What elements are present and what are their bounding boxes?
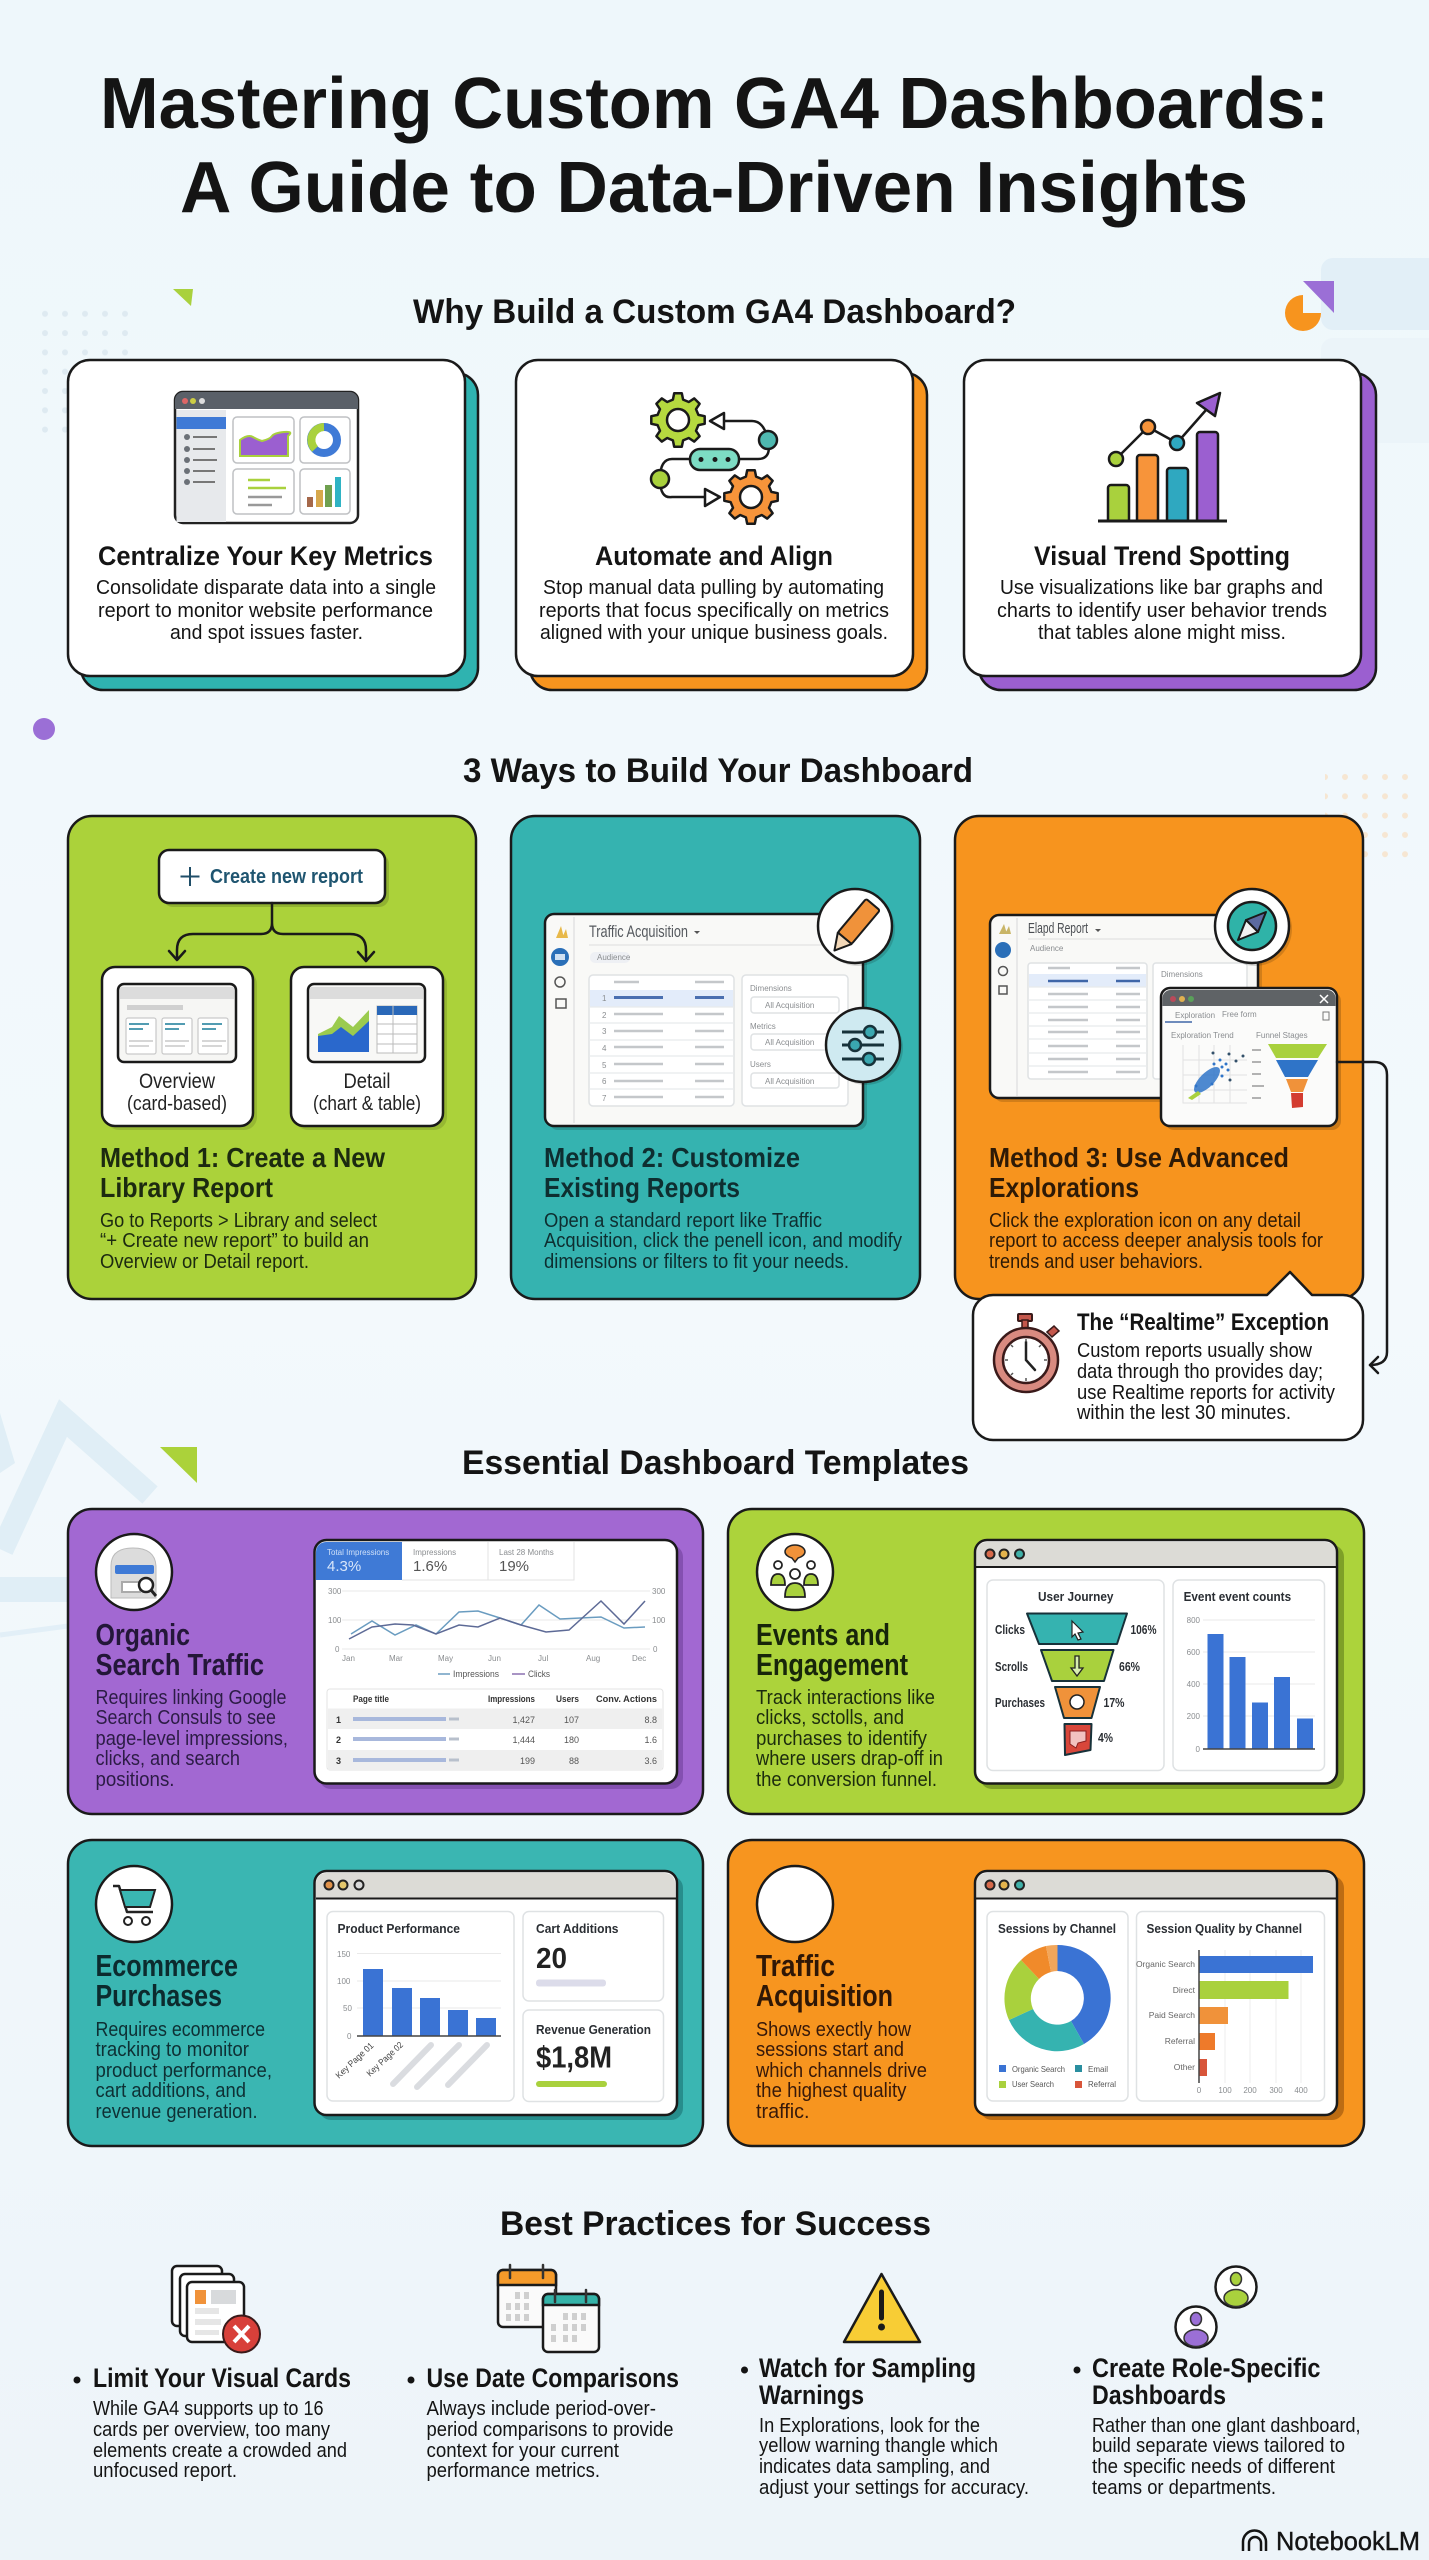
window: search console report: Mar	[389, 1654, 403, 1663]
window: search console report: Jan	[342, 1654, 355, 1663]
decorative shape: purple dot	[33, 718, 55, 740]
column: limit your visual cards	[74, 2266, 351, 2482]
panel: visual trend spotting: charts to identify user behavior trends	[997, 599, 1327, 622]
panel: method 3: Method 3: Use Advanced	[989, 1142, 1289, 1173]
panel: events and engagement: the conversion funnel.	[756, 1768, 937, 1791]
window: traffic acquisition report: 3	[602, 1027, 607, 1036]
panel: method 1: “+ Create new report” to build an	[100, 1230, 369, 1252]
title	[100, 64, 1329, 228]
window: user journey funnel: 66%	[1119, 1659, 1140, 1674]
window: detail report: Elapd Report	[1028, 920, 1089, 937]
decorative icon: orange pie and purple triangle	[1285, 281, 1334, 331]
window: exploration charts	[1161, 988, 1341, 1130]
title: Mastering Custom GA4 Dashboards:	[100, 64, 1329, 144]
window: detail report: Dimensions	[1161, 970, 1203, 979]
window: channel charts: Organic Search	[1012, 2064, 1065, 2074]
icon: gears workflow	[651, 393, 778, 524]
panel: organic search traffic: Search Consuls to see	[96, 1706, 276, 1729]
bullet	[1074, 2366, 1080, 2374]
window: search console report: Dec	[632, 1654, 646, 1663]
panel: automate and align: Stop manual data pulling by automating	[543, 576, 884, 599]
panel: organic search traffic: page-level impressions,	[96, 1727, 288, 1750]
window: search console report: 1.6%	[413, 1558, 447, 1575]
panel: events and engagement: clicks, sctolls, and	[756, 1706, 904, 1729]
column: create role-specific dashboards: Create Role-Specific	[1092, 2353, 1320, 2383]
bullet	[408, 2376, 414, 2384]
panel: centralize your key metrics: report to monitor website performance	[98, 599, 433, 622]
column: create role-specific dashboards: Dashboards	[1092, 2380, 1226, 2410]
window: channel charts: Sessions by Channel	[998, 1921, 1116, 1936]
icon: users discussing	[757, 1534, 833, 1610]
panel: events and engagement: purchases to identify	[756, 1727, 928, 1750]
window: user journey funnel: 400	[1187, 1680, 1201, 1689]
window: search console report: May	[438, 1654, 453, 1663]
window: user journey funnel: Clicks	[995, 1622, 1025, 1637]
window: channel charts: Other	[1174, 2062, 1195, 2072]
window: channel charts: 200	[1243, 2086, 1257, 2095]
button: create new report	[159, 850, 389, 907]
column: create role-specific dashboards: the specific needs of different	[1092, 2456, 1335, 2478]
panel: centralize your key metrics: and spot issues faster.	[170, 621, 363, 644]
panel: ecommerce purchases: product performance,	[96, 2059, 272, 2082]
window: search console report: 300	[328, 1587, 342, 1596]
window: search console report: 107	[564, 1715, 579, 1725]
panel: ecommerce purchases: cart additions, and	[96, 2079, 246, 2102]
column: watch for sampling warnings	[741, 2274, 1029, 2499]
column: create role-specific dashboards	[1074, 2266, 1360, 2499]
window: search console report	[314, 1540, 683, 1789]
icon: filter sliders	[826, 1008, 903, 1085]
callout: realtime exception	[973, 1272, 1363, 1440]
panel: method 3	[955, 816, 1363, 1299]
column: use date comparisons	[408, 2265, 679, 2482]
icon: search report	[96, 1534, 172, 1610]
window: user journey funnel	[975, 1540, 1344, 1789]
window: search console report: Impressions	[413, 1548, 456, 1557]
window: search console report: 3	[336, 1756, 341, 1766]
panel: method 3: Explorations	[989, 1172, 1139, 1203]
panel: visual trend spotting: Visual Trend Spotting	[1034, 541, 1290, 571]
window: exploration charts: Exploration	[1175, 1011, 1215, 1020]
window: search console report: Clicks	[528, 1669, 550, 1679]
bullet	[741, 2366, 748, 2374]
panel: visual trend spotting: that tables alone might miss.	[1038, 621, 1286, 644]
window: search console report: Aug	[586, 1654, 600, 1663]
window: product performance: 20	[536, 1943, 567, 1975]
panel: ecommerce purchases: Ecommerce	[96, 1948, 238, 1983]
window: product performance: 0	[347, 2032, 352, 2041]
callout: realtime exception: within the lest 30 minutes.	[1076, 1402, 1291, 1424]
heading: best practices: Best Practices for Success	[500, 2205, 931, 2243]
window: traffic acquisition report: All Acquisition	[765, 1077, 814, 1086]
panel: method 2: Method 2: Customize	[544, 1142, 800, 1173]
column: limit your visual cards: cards per overview, too many	[93, 2419, 330, 2441]
decorative shape: green triangle	[160, 1447, 197, 1483]
window: product performance: 150	[337, 1950, 351, 1959]
column: use date comparisons: Use Date Comparisons	[426, 2363, 679, 2393]
icon: stacked cards with x	[172, 2266, 260, 2352]
window: search console report: 1.6	[644, 1735, 657, 1745]
panel: method 3: Click the exploration icon on any detail	[989, 1210, 1301, 1232]
panel: ecommerce purchases: Purchases	[96, 1978, 222, 2013]
callout: realtime exception: The “Realtime” Exception	[1077, 1309, 1329, 1336]
panel: centralize your key metrics: Consolidate disparate data into a single	[96, 576, 436, 599]
window: search console report: Impressions	[453, 1669, 499, 1679]
window: traffic acquisition report: All Acquisition	[765, 1001, 814, 1010]
window: search console report: 100	[328, 1616, 342, 1625]
callout: realtime exception: Custom reports usually show	[1077, 1340, 1312, 1362]
window: user journey funnel: Scrolls	[995, 1659, 1028, 1674]
column: watch for sampling warnings: indicates data sampling, and	[759, 2456, 990, 2478]
panel: organic search traffic: Requires linking Google	[96, 1686, 286, 1709]
panel: visual trend spotting	[964, 360, 1376, 690]
window: search console report: 19%	[499, 1558, 529, 1575]
window: search console report: Total Impressions	[327, 1548, 389, 1557]
column: create role-specific dashboards: teams or departments.	[1092, 2477, 1276, 2499]
panel: traffic acquisition: sessions start and	[756, 2038, 904, 2061]
window: product performance: $1,8M	[536, 2040, 612, 2074]
window: product performance: Key Page 01	[334, 2040, 375, 2080]
panel: method 2: dimensions or filters to fit your needs.	[544, 1251, 849, 1273]
window: user journey funnel: Purchases	[995, 1695, 1045, 1710]
window: traffic acquisition report: Audience	[597, 953, 631, 962]
heading: 3 ways: 3 Ways to Build Your Dashboard	[463, 752, 973, 790]
button: create new report: Create new report	[210, 866, 363, 888]
window: traffic acquisition report: All Acquisition	[765, 1038, 814, 1047]
panel: automate and align	[516, 360, 927, 690]
panel: events and engagement	[728, 1509, 1364, 1814]
window: search console report: 3.6	[644, 1756, 657, 1766]
window: user journey funnel: 600	[1187, 1648, 1201, 1657]
column: limit your visual cards: Limit Your Visual Cards	[93, 2363, 351, 2393]
icon: shopping cart	[96, 1866, 172, 1942]
bullet	[74, 2376, 80, 2384]
window: search console report: 2	[336, 1735, 341, 1745]
window: user journey funnel: 17%	[1104, 1695, 1125, 1710]
panel: ecommerce purchases: revenue generation.	[96, 2100, 258, 2123]
window: channel charts: User Search	[1012, 2079, 1054, 2089]
panel: organic search traffic: Organic	[96, 1617, 190, 1652]
window: traffic acquisition report: 6	[602, 1077, 607, 1086]
window: product performance	[314, 1871, 683, 2120]
icon: warning triangle	[844, 2274, 920, 2342]
window: traffic acquisition report	[545, 914, 867, 1130]
window: user journey funnel: 800	[1187, 1616, 1201, 1625]
window: search console report: 0	[653, 1645, 658, 1654]
window: search console report: 1,427	[512, 1715, 535, 1725]
panel: method 1: Library Report	[100, 1172, 273, 1203]
window: exploration charts: Exploration Trend	[1171, 1031, 1234, 1040]
window: search console report: Impressions	[488, 1694, 535, 1704]
panel: automate and align: aligned with your unique business goals.	[540, 621, 888, 644]
panel: traffic acquisition: traffic.	[756, 2100, 810, 2123]
card: overview	[102, 967, 257, 1130]
window: channel charts: Paid Search	[1149, 2010, 1195, 2020]
window: traffic acquisition report: 5	[602, 1061, 607, 1070]
window: traffic acquisition report: 2	[602, 1011, 607, 1020]
panel: method 3: report to access deeper analysis tools for	[989, 1230, 1323, 1252]
window: product performance: Revenue Generation	[536, 2022, 651, 2037]
panel: centralize your key metrics: Centralize Your Key Metrics	[98, 541, 433, 571]
window: channel charts: Organic Search	[1136, 1959, 1195, 1969]
panel: traffic acquisition: Shows exectly how	[756, 2018, 911, 2041]
panel: method 2	[511, 816, 920, 1299]
window: traffic acquisition report: Metrics	[750, 1022, 776, 1031]
window: search console report: 1,444	[512, 1735, 535, 1745]
window: traffic acquisition report: Traffic Acquisition	[589, 922, 688, 941]
panel: method 2: Open a standard report like Traffic	[544, 1210, 822, 1232]
panel: traffic acquisition: Acquisition	[756, 1978, 893, 2013]
panel: visual trend spotting: Use visualizations like bar graphs and	[1000, 576, 1323, 599]
column: watch for sampling warnings: adjust your settings for accuracy.	[759, 2477, 1029, 2499]
column: limit your visual cards: While GA4 supports up to 16	[93, 2398, 324, 2420]
panel: method 2: Acquisition, click the penell icon, and modify	[544, 1230, 902, 1252]
column: watch for sampling warnings: Watch for Sampling	[759, 2353, 976, 2383]
window: product performance: 50	[343, 2004, 352, 2013]
panel: centralize your key metrics	[68, 360, 478, 690]
callout: realtime exception: data through tho provides day;	[1077, 1361, 1323, 1383]
window: traffic acquisition report: 1	[602, 994, 607, 1003]
panel: events and engagement: where users drap-off in	[755, 1747, 943, 1770]
callout: realtime exception: use Realtime reports for activity	[1077, 1382, 1335, 1404]
window: detail report	[990, 915, 1262, 1102]
window: search console report: 199	[520, 1756, 535, 1766]
decorative shape: green triangle	[173, 289, 193, 306]
window: channel charts: 100	[1218, 2086, 1232, 2095]
window: user journey funnel: 200	[1187, 1712, 1201, 1721]
window: traffic acquisition report: Users	[750, 1060, 771, 1069]
window: product performance: Key Page 02	[365, 2040, 405, 2078]
card: overview: (card-based)	[127, 1093, 227, 1115]
window: search console report: 88	[569, 1756, 579, 1766]
panel: automate and align: Automate and Align	[595, 541, 833, 571]
column: use date comparisons: context for your current	[426, 2440, 619, 2462]
panel: ecommerce purchases	[68, 1840, 703, 2146]
window: traffic acquisition report: 4	[602, 1044, 607, 1053]
icon: calendars	[498, 2265, 599, 2352]
window: search console report: 1	[336, 1715, 341, 1725]
window: exploration charts: Free form	[1222, 1010, 1257, 1019]
arrow: explorations to realtime callout	[1337, 1062, 1387, 1373]
window: user journey funnel: 0	[1196, 1745, 1201, 1754]
panel: method 3: trends and user behaviors.	[989, 1251, 1203, 1273]
column: watch for sampling warnings: In Explorations, look for the	[759, 2415, 980, 2437]
window: search console report: 300	[652, 1587, 666, 1596]
window: channel charts: Session Quality by Channel	[1146, 1921, 1302, 1936]
window: channel charts: Direct	[1173, 1985, 1196, 1995]
panel: method 1: Overview or Detail report.	[100, 1251, 309, 1273]
icon: pencil	[818, 889, 895, 966]
panel: method 1: Method 1: Create a New	[100, 1142, 385, 1173]
window: user journey funnel: User Journey	[1038, 1589, 1114, 1604]
window: exploration charts: Funnel Stages	[1256, 1031, 1308, 1040]
panel: method 2: Existing Reports	[544, 1172, 740, 1203]
window: traffic acquisition report: Dimensions	[750, 984, 792, 993]
heading: essential templates: Essential Dashboard Templates	[462, 1444, 969, 1482]
icon: empty circle	[757, 1866, 833, 1942]
icon: user badges	[1176, 2266, 1256, 2348]
panel: ecommerce purchases: tracking to monitor	[96, 2038, 249, 2061]
arrow: branch to two report types	[169, 903, 374, 961]
panel: traffic acquisition: the highest quality	[756, 2079, 907, 2102]
panel: traffic acquisition	[728, 1840, 1364, 2146]
window: search console report: Conv. Actions	[596, 1694, 657, 1704]
column: watch for sampling warnings: Warnings	[759, 2380, 864, 2410]
panel: events and engagement: Events and	[756, 1617, 890, 1652]
window: channel charts: 0	[1197, 2086, 1202, 2095]
window: search console report: 100	[652, 1616, 666, 1625]
panel: organic search traffic	[68, 1509, 703, 1814]
window: channel charts: 300	[1269, 2086, 1283, 2095]
window: channel charts: Email	[1088, 2064, 1108, 2074]
panel: traffic acquisition: Traffic	[756, 1948, 835, 1983]
window: search console report: Jul	[538, 1654, 548, 1663]
panel: events and engagement: Track interactions like	[756, 1686, 935, 1709]
card: detail	[291, 967, 447, 1130]
column: limit your visual cards: elements create a crowded and	[93, 2440, 347, 2462]
card: overview: Overview	[139, 1070, 216, 1093]
heading: why build: Why Build a Custom GA4 Dashboard?	[413, 293, 1016, 331]
panel: organic search traffic: Search Traffic	[96, 1647, 264, 1682]
window: search console report: 8.8	[644, 1715, 657, 1725]
icon: compass	[1215, 889, 1292, 966]
chart: sessions donut	[1004, 1945, 1111, 2051]
window: search console report: Page title	[353, 1694, 389, 1704]
window: channel charts	[975, 1871, 1344, 2120]
window: channel charts: 400	[1294, 2086, 1308, 2095]
window: user journey funnel: 4%	[1098, 1730, 1113, 1745]
panel: ecommerce purchases: Requires ecommerce	[96, 2018, 265, 2041]
panel: automate and align: reports that focus specifically on metrics	[539, 599, 889, 622]
icon: bar chart with trend arrow	[1098, 393, 1227, 521]
window: search console report: 180	[564, 1735, 579, 1745]
window: channel charts: Referral	[1088, 2079, 1116, 2089]
icon: stopwatch	[994, 1314, 1059, 1392]
window: search console report: Last 28 Months	[499, 1548, 554, 1557]
window: search console report: Jun	[488, 1654, 501, 1663]
column: create role-specific dashboards: build separate views tailored to	[1092, 2435, 1345, 2457]
window: search console report: Users	[556, 1694, 579, 1704]
column: limit your visual cards: unfocused report.	[93, 2460, 237, 2482]
window: product performance: Cart Additions	[536, 1921, 618, 1936]
window: product performance: Product Performance	[338, 1921, 460, 1936]
panel: organic search traffic: positions.	[96, 1768, 174, 1791]
window: product performance: 100	[337, 1977, 351, 1986]
window: detail report: Audience	[1030, 944, 1064, 953]
card: detail: Detail	[344, 1070, 390, 1093]
window: user journey funnel: Event event counts	[1184, 1589, 1291, 1604]
window: search console report: 0	[335, 1645, 340, 1654]
logo: NotebookLM: NotebookLM	[1276, 2526, 1420, 2556]
panel: events and engagement: Engagement	[756, 1647, 908, 1682]
column: watch for sampling warnings: yellow warning thangle which	[759, 2435, 998, 2457]
panel: organic search traffic: clicks, and search	[96, 1747, 240, 1770]
icon: dashboard window	[175, 392, 358, 523]
window: user journey funnel: 106%	[1130, 1622, 1157, 1637]
column: create role-specific dashboards: Rather than one glant dashboard,	[1092, 2415, 1360, 2437]
panel: method 1: Go to Reports > Library and select	[100, 1210, 377, 1232]
window: search console report: 4.3%	[327, 1558, 361, 1575]
column: use date comparisons: performance metrics.	[426, 2460, 600, 2482]
card: detail: (chart & table)	[313, 1093, 421, 1115]
column: use date comparisons: period comparisons to provide	[426, 2419, 674, 2441]
window: channel charts: Referral	[1165, 2036, 1195, 2046]
column: use date comparisons: Always include period-over-	[426, 2398, 656, 2420]
panel: method 1	[68, 816, 476, 1299]
window: traffic acquisition report: 7	[602, 1094, 607, 1103]
panel: traffic acquisition: which channels drive	[755, 2059, 927, 2082]
title: A Guide to Data-Driven Insights	[180, 148, 1248, 228]
